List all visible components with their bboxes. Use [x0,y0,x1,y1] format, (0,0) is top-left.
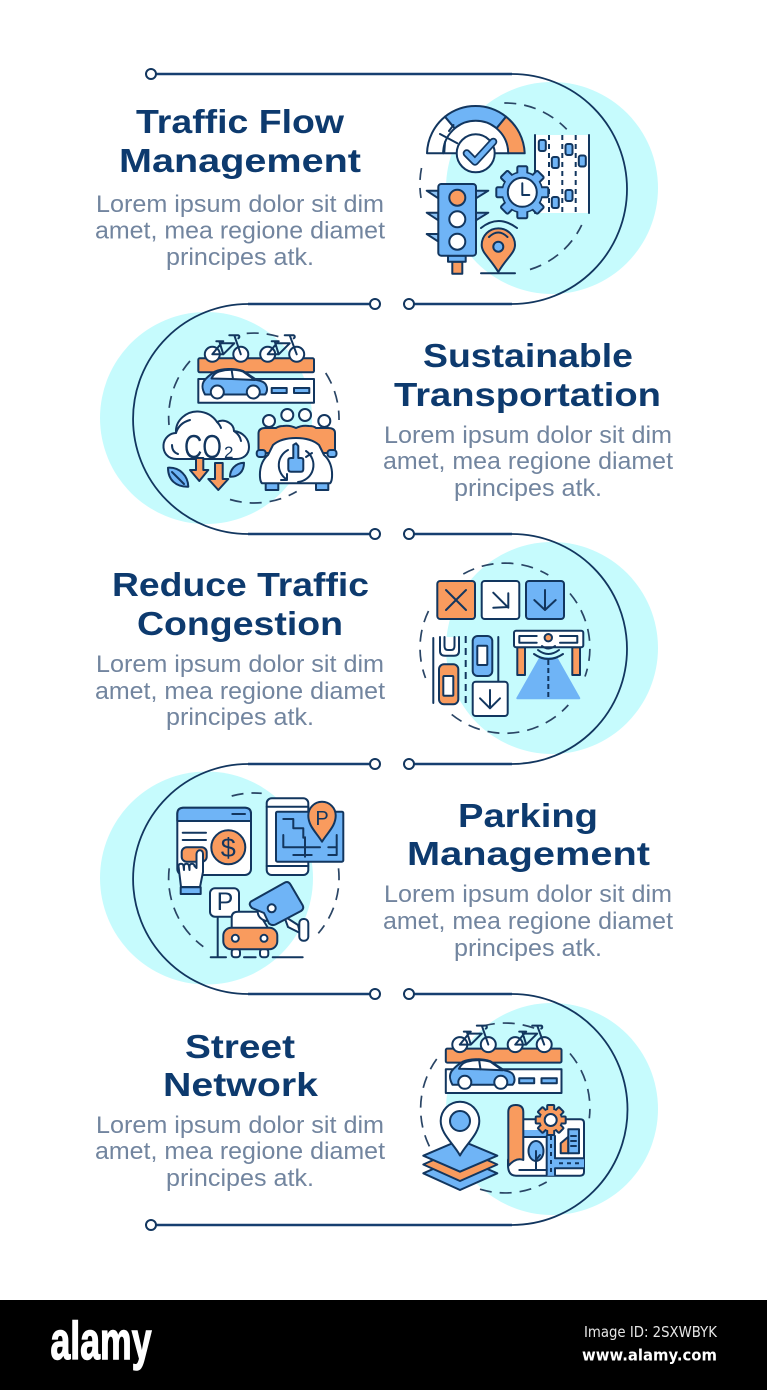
icon: carpool with key [257,409,336,490]
heading: Street [185,1028,295,1065]
body text [383,422,673,502]
heading: Reduce Traffic [112,566,369,603]
icon: parking lot with cars [433,636,508,716]
heading [394,337,661,413]
icon: location pin with signal [481,221,517,273]
icon: speed gauge [427,106,525,172]
body text: amet, mea regione diamet [95,218,385,244]
logo: alamy [50,1312,152,1371]
icon: map pin on layers [423,1102,497,1190]
connector line [146,989,628,1230]
background circle [100,772,313,984]
body text: principes atk. [166,704,314,731]
background circle [100,312,312,524]
panel: traffic flow management [95,69,658,309]
heading: Sustainable [423,337,633,374]
icon: road with cars [535,135,589,213]
dashed ring [169,333,339,503]
body text [95,191,385,271]
dashed ring [420,563,590,733]
heading: Network [163,1066,319,1103]
body text: Lorem ipsum dolor sit dim [96,651,384,678]
heading [119,103,361,179]
heading [112,566,369,642]
footer bar [0,1300,767,1390]
body text [383,881,673,962]
heading: Traffic Flow [136,103,344,140]
icon: toll gate with road [514,631,583,698]
connector line [404,529,627,769]
heading: Management [119,142,361,179]
heading: Parking [458,797,598,834]
body text: Lorem ipsum dolor sit dim [384,881,672,908]
icon: CO2 cloud with arrows and leaves [163,411,249,490]
dashed ring [421,1023,590,1193]
panel: parking management [100,759,673,999]
icon: clock gear [496,166,548,218]
body text: Lorem ipsum dolor sit dim [96,191,384,218]
body text: amet, mea regione diamet [383,448,673,475]
body text: Lorem ipsum dolor sit dim [384,422,672,449]
body text: amet, mea regione diamet [95,678,385,705]
body text [95,1112,385,1192]
background circle [446,1003,658,1215]
image id: Image ID: 2SXWBYK [584,1323,718,1341]
body text: principes atk. [454,475,602,502]
icon: phone with parking map [267,798,343,875]
body text: amet, mea regione diamet [95,1138,385,1165]
connector line [133,759,380,999]
connector line [146,69,627,309]
body text: principes atk. [166,1165,314,1192]
icon: traffic light [427,184,488,274]
icon: parking sign and car: P [217,888,233,916]
heading: Congestion [137,605,343,642]
panel: sustainable transportation [100,299,673,539]
heading: Management [407,835,650,872]
body text: principes atk. [166,244,314,271]
icon: direction signs [437,581,564,619]
dashed ring [420,103,582,270]
panel: street network [95,989,658,1230]
icon: bikes and car on road [198,335,314,403]
connector line [133,299,380,539]
panel: reduce traffic congestion [95,529,658,769]
website: www.alamy.com [582,1346,717,1364]
icon: CO2 cloud with arrows and leaves: CO [184,428,222,465]
icon: city plan with gear [508,1105,584,1176]
icon: bikes and car on road [446,1026,562,1093]
heading: Transportation [394,376,661,413]
body text: Lorem ipsum dolor sit dim [96,1112,384,1139]
icon: payment window with hand [177,808,251,894]
heading [407,797,650,872]
dashed ring [169,793,339,947]
body text [95,651,385,731]
heading [163,1028,319,1103]
body text: principes atk. [454,935,602,962]
body text: amet, mea regione diamet [383,908,673,935]
background circle [446,82,658,294]
icon: phone with parking map: P [315,808,329,830]
icon: CO2 cloud with arrows and leaves: 2 [224,443,233,462]
icon: security camera [250,882,308,941]
icon: parking sign and car [210,888,303,957]
icon: payment window with hand: $ [221,833,236,863]
background circle [446,542,658,754]
